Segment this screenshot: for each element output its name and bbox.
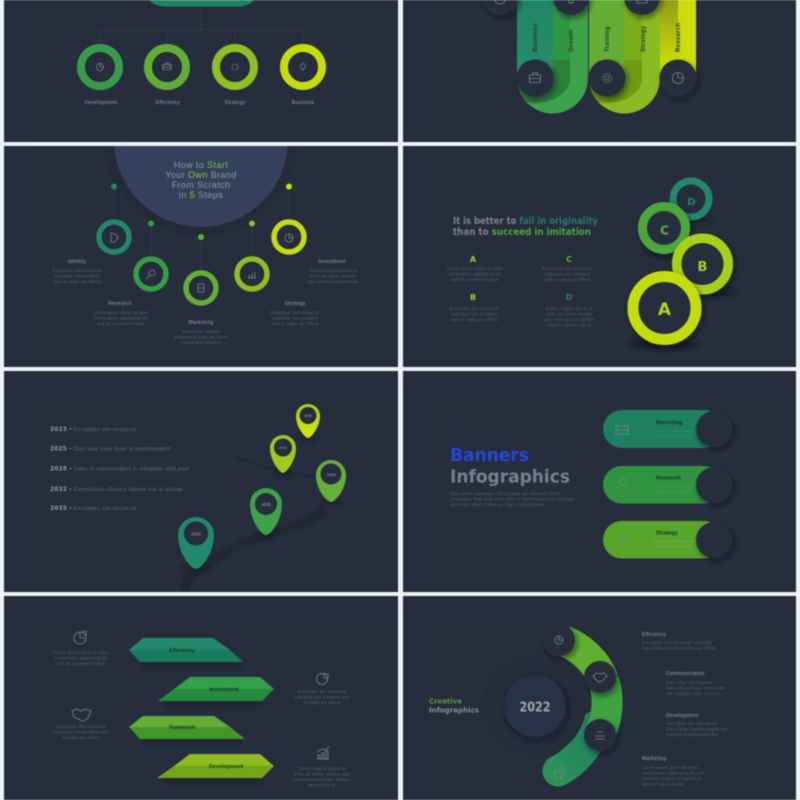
year circle — [504, 675, 566, 737]
banner: Marketing: Marketing — [656, 420, 682, 426]
timeline list: 2028 - Dolor in reprehenderit in voluptate velit esse — [50, 466, 190, 472]
text: development — [666, 713, 727, 737]
top pill — [149, 0, 254, 6]
banner: Marketing — [603, 410, 732, 448]
ring: Strategy — [216, 48, 254, 86]
ring labels — [85, 100, 315, 106]
ground shadows — [628, 218, 735, 348]
item C: sunt in culpa qui officia — [543, 277, 591, 282]
shape shadows — [145, 663, 260, 782]
year circle: 2022 — [520, 700, 550, 716]
text: identity — [52, 259, 102, 284]
arc segment: middle — [601, 680, 607, 731]
pin 2035: 2035 — [304, 414, 312, 418]
text: marketing: Marketing — [642, 756, 667, 762]
text: teamwork note — [53, 724, 110, 740]
heading: Banners — [450, 446, 529, 466]
text: investment note — [294, 689, 351, 705]
banner: Strategy: cupidatat non proident — [654, 544, 693, 548]
text: strategy — [270, 301, 320, 326]
paragraph: velit esse cillum dolore eu fugiat nulla pariatur — [450, 502, 545, 507]
text: marketing: deserunt ut enim ad minim — [174, 334, 228, 340]
banner: Research — [603, 466, 732, 504]
text: strategy: cupidatat non proident — [272, 316, 319, 320]
timeline list: 2035 - Excepteur sint occaecat — [50, 506, 137, 512]
ring A — [633, 276, 696, 340]
title: Your Own Brand — [165, 170, 237, 180]
text: investment: Investment — [318, 259, 346, 265]
ribbon labels: Research — [676, 23, 682, 52]
panel: 3D parallelograms — [4, 596, 398, 800]
text: marketing: eiusmod tempor incididunt ut — [642, 776, 702, 781]
item B: cupidatat non proident — [451, 312, 498, 316]
ring labels: Strategy — [224, 100, 246, 106]
text: research: consectetur adipiscing elit — [94, 316, 148, 320]
item C: C — [566, 255, 572, 264]
text: development: fusce dolor mauris magna nisi — [666, 726, 727, 732]
quote heading: It is better to fail in originality — [453, 216, 599, 227]
text: development note: enim ad minim veniam quis — [294, 772, 350, 776]
item C: Excepteur sint occaecat — [542, 266, 592, 271]
text: investment note: Excepteur sint occaecat — [297, 689, 347, 694]
text: development note — [293, 766, 351, 788]
bar: Investment: Investment — [209, 687, 239, 693]
pin 2028: 2028 — [327, 472, 336, 477]
icon: handshake — [72, 709, 91, 721]
pin 2035 — [296, 404, 320, 438]
ring: investment — [274, 222, 304, 252]
banner: Research: Excepteur sint occaecat — [654, 484, 695, 488]
text: marketing: consectetur adipiscing elit sed — [642, 770, 705, 776]
arc segment: bottom — [558, 727, 594, 771]
bar: Efficiency — [129, 638, 243, 662]
ring labels: Efficiency — [156, 100, 180, 106]
pin 2022: 2022 — [191, 532, 202, 536]
ring D — [673, 181, 709, 217]
top circles — [482, 0, 660, 15]
text: communication: non dapibus diam rhoncus — [666, 691, 720, 696]
ribbon: Research — [660, 0, 696, 80]
ring B: B — [698, 260, 707, 275]
dots — [111, 184, 292, 240]
ring: Efficiency — [148, 48, 186, 86]
item D: D — [566, 293, 573, 302]
item A — [447, 255, 503, 282]
ribbon labels: Business — [533, 23, 539, 52]
panel: quote with ABCD circles — [403, 146, 796, 367]
text: communication — [666, 671, 725, 696]
heading: Infographics — [429, 706, 479, 714]
big semicircle — [114, 146, 288, 228]
node: handshake — [584, 661, 616, 693]
ring: Development — [81, 48, 119, 86]
item A: A — [470, 255, 477, 264]
panel: vertical ribbons — [403, 0, 796, 142]
bar: Teamwork: Teamwork — [169, 725, 196, 731]
title: How to Start — [174, 160, 228, 170]
node: pie chart — [543, 624, 575, 656]
text: teamwork note: in culpa qui officia — [62, 735, 100, 740]
ring C: C — [660, 224, 669, 238]
text: research: Research — [108, 301, 132, 307]
title: in 5 Steps — [179, 190, 223, 200]
heading — [450, 446, 570, 488]
pin 2022 — [178, 517, 214, 569]
connector lines — [100, 6, 303, 44]
text: investment: enim ad minim veniam — [310, 274, 356, 278]
pin 2032 — [270, 435, 296, 473]
text: marketing: Excepteur cupidat — [183, 329, 220, 334]
banner: Strategy — [603, 521, 732, 558]
panel: banners — [403, 371, 796, 592]
item D: Donec magna ipsum ut — [545, 306, 593, 311]
heading: Creative — [429, 696, 462, 706]
banner: Marketing: cupidatat non proident — [654, 434, 693, 438]
circle: briefcase — [516, 60, 554, 96]
text: development note: nostrud exercitation ullamco — [293, 777, 351, 782]
ring B — [677, 238, 728, 290]
ring: strategy — [237, 259, 267, 289]
ring labels: Development — [85, 100, 118, 106]
quote heading — [453, 216, 599, 238]
text: research — [93, 301, 149, 326]
bar: Development: Development — [209, 764, 243, 770]
item D: quis nostrud exercitation — [544, 317, 595, 322]
text: development: tristique tempor proin dui — [666, 732, 717, 737]
text: marketing — [174, 320, 228, 345]
bar: Teamwork — [129, 716, 245, 739]
pin 2032: 2032 — [279, 446, 287, 450]
pin 2025 — [250, 488, 282, 535]
text: development note: Donec magna ipsum ut — [298, 766, 346, 771]
ring: research — [136, 259, 166, 289]
text: identity: Excepteur sint occaecat — [52, 268, 102, 273]
text: efficiency: Efficiency — [642, 632, 667, 638]
item B — [449, 293, 499, 322]
heading: Infographics — [450, 468, 570, 488]
text: communication: Nam vitae nisi aliquam — [666, 680, 713, 685]
title — [165, 160, 237, 200]
item A: consectetur adipiscing elit — [448, 272, 502, 276]
text: teamwork note: Excepteur sint occaecat — [56, 724, 106, 729]
panel: org chart — [4, 0, 398, 142]
text: investment: quis nostrud exercitation — [308, 279, 359, 284]
item C: cupidatat non proident — [544, 272, 591, 276]
ribbon: Training to Strategy — [588, 0, 661, 114]
timeline list: 2032 - Exercitation ullamco laboris nisi ut aliquip — [50, 487, 183, 493]
item A: sed do eiusmod tempor — [451, 277, 499, 282]
text: marketing — [642, 756, 705, 786]
timeline list: 2023 - Excepteur sint occaecat — [50, 427, 137, 433]
timeline list: 2025 - Duis aute irure dolor in reprehenderit — [50, 446, 171, 452]
timeline list — [50, 427, 190, 512]
title: From Scratch — [172, 180, 230, 190]
text: marketing: Marketing — [189, 320, 213, 326]
paragraph — [450, 491, 575, 507]
text: efficiency — [642, 632, 717, 650]
text: efficiency note: consectetur adipiscing elit — [54, 656, 108, 660]
item B: Excepteur sint occaecat — [449, 306, 499, 311]
panel: five steps — [3, 145, 399, 368]
circle: pie chart — [660, 60, 696, 96]
road — [183, 510, 325, 595]
ring: identity — [99, 222, 129, 252]
panel: 2022 arc — [403, 596, 796, 800]
panel: map pins timeline — [4, 371, 398, 595]
ribbon: Business to Growth — [516, 0, 589, 114]
paragraph: Duis autem vulputate velit in culpa qui deserunt mollit — [450, 491, 560, 496]
text: identity: Identity — [68, 259, 86, 265]
ring labels: Business — [292, 100, 315, 106]
text: research: Lorem ipsum dolor sit amet — [93, 310, 149, 315]
ring C — [642, 206, 686, 250]
circle: gear — [588, 60, 626, 96]
bar: Development — [157, 754, 274, 778]
text: marketing: Lorem ipsum dolor sit amet — [642, 765, 698, 770]
text: research: sed do eiusmod tempor — [97, 321, 145, 326]
text: communication: Communication — [666, 671, 705, 677]
banner: Strategy: Strategy — [656, 530, 679, 536]
text: investment note: in culpa qui officia — [303, 700, 341, 705]
icon: pie chart — [74, 632, 86, 644]
text: development: Sed ligula nisi ultrices mi — [666, 721, 717, 726]
banner: Research: cupidatat non proident — [654, 490, 693, 494]
ribbon labels — [533, 23, 682, 52]
text: investment note: cupidatat non proident sunt — [294, 694, 351, 700]
item D: ullamco laboris nisi ut — [547, 322, 592, 328]
item B: sunt in culpa qui officia — [450, 317, 498, 322]
arc segment: top — [564, 641, 604, 680]
ribbon labels: Training — [605, 26, 611, 52]
text: investment — [308, 259, 359, 284]
connector lines — [114, 186, 289, 271]
text: teamwork note: cupidatat non proident sunt — [53, 730, 110, 734]
ring: Business — [284, 48, 322, 86]
banner: Marketing: Excepteur sint occaecat — [654, 429, 695, 433]
text: investment: Donec magna ipsum ut — [309, 268, 357, 273]
text: efficiency note — [53, 650, 109, 666]
item B: B — [470, 293, 476, 302]
heading — [429, 696, 479, 714]
text: communication: fusce ullamcorper ultrices mi — [666, 686, 725, 690]
bar: Efficiency: Efficiency — [169, 648, 196, 654]
text: identity: sunt in culpa qui officia — [53, 279, 101, 284]
text: strategy: sunt in culpa qui officia — [271, 321, 319, 326]
text: identity: cupidatat non proident — [54, 274, 101, 278]
node: chart — [584, 719, 616, 751]
banner: Strategy: Excepteur sint occaecat — [654, 540, 695, 544]
halo — [482, 653, 586, 757]
item A: Lorem ipsum dolor sit amet — [447, 266, 503, 271]
ribbon labels: Growth — [569, 29, 575, 52]
bottom icon — [555, 768, 565, 778]
text: efficiency note: sed do eiusmod tempor — [57, 661, 105, 666]
quote heading: than to succeed in imitation — [453, 227, 591, 238]
icon: piggy bank — [316, 674, 328, 684]
ring: marketing — [186, 273, 216, 303]
halo arc — [103, 42, 299, 238]
text: strategy: Strategy — [284, 301, 306, 307]
item D: enim ad minim veniam — [546, 312, 592, 316]
top icons — [495, 0, 647, 4]
text: efficiency: non proident sunt in culpa qui officia — [642, 646, 717, 650]
text: marketing: dolore magna aliqua — [642, 782, 684, 786]
text: development note: laboris nisi ut — [308, 782, 336, 788]
text: efficiency: Excepteur sint occaecat cupidatat — [642, 640, 712, 645]
banner: Research: Research — [656, 476, 681, 482]
bar: Investment — [158, 677, 274, 701]
text: development: Development — [666, 713, 699, 719]
pin shadows — [182, 436, 341, 572]
text: efficiency note: Lorem ipsum dolor sit amet — [53, 650, 109, 655]
pin 2025: 2025 — [261, 502, 271, 507]
item D — [544, 293, 595, 328]
text: strategy: Excepteur sint occaecat — [270, 310, 320, 315]
ribbon labels: Strategy — [641, 25, 647, 52]
paragraph: consequat. Duis aute irure dolor in reprehenderit in voluptate — [450, 496, 575, 502]
item C — [542, 255, 592, 282]
icon: bar chart — [317, 747, 329, 759]
pin 2028 — [316, 460, 346, 502]
ring D: D — [687, 197, 696, 208]
text: marketing: exercitation ullamco — [180, 340, 222, 345]
ring A: A — [658, 300, 672, 320]
